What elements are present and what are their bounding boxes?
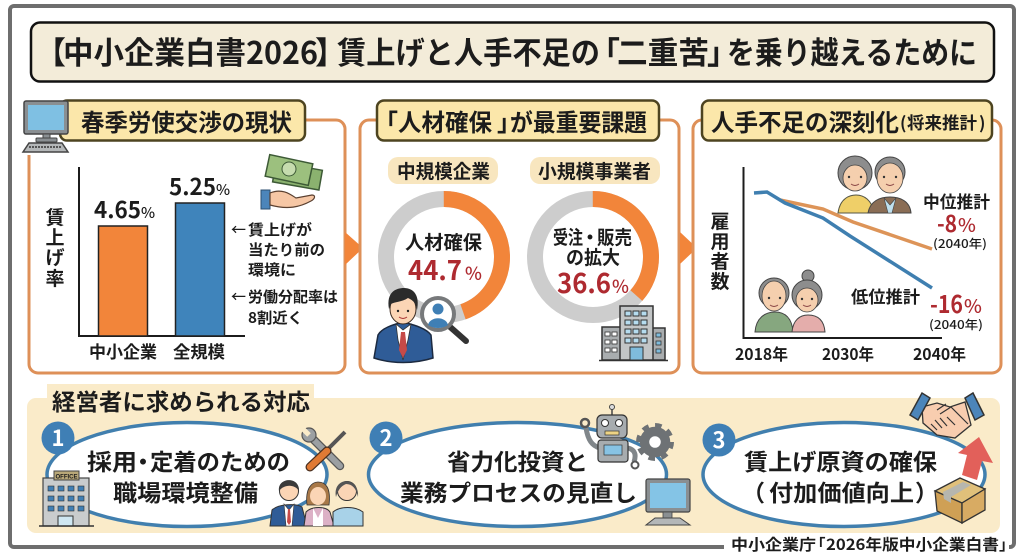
value: 4.65%: 4.65: [94, 191, 141, 225]
callout: 中位推計 -8%: [923, 188, 990, 252]
icon: computer: [23, 101, 68, 152]
icon: wrench and screwdriver: [302, 428, 345, 467]
action 2: 省力化投資: 省力化投資と: [447, 443, 588, 477]
line: 低位推計: [754, 192, 932, 288]
x axis labels: 2040年: [913, 341, 966, 365]
icon: three workers: [270, 480, 363, 526]
panel heading: 」: [497, 103, 521, 138]
number badge 1: 1: [52, 421, 64, 453]
axis label: 雇用者数: 者: [710, 247, 730, 274]
source note: 2026年版中小企業白書: [826, 533, 999, 555]
donut chart: 受注・販売の拡大 36.6%: の拡大: [566, 243, 620, 270]
action 3: 賃上げ原資: （: [742, 474, 765, 508]
label: 全規模: 全規模: [173, 338, 225, 363]
axis label: 雇用者数: 雇: [710, 207, 730, 234]
arrow: panel 1 to 2: [345, 232, 363, 265]
icon: businessman with magnifier: [374, 288, 466, 362]
action 3: 賃上げ原資: ）: [915, 474, 938, 508]
number badge 1: [42, 421, 74, 454]
pill: 中規模企業: 中規模企業: [397, 157, 490, 184]
icon: money on hand: [261, 155, 322, 209]
action 1: 採用・定着: 採用: [87, 443, 137, 477]
action 3: 賃上げ原資: [702, 393, 993, 526]
annotation: 賃上げが当たり前の環境に: 当たり前の: [248, 239, 325, 260]
callout: 中位推計 -8%: %: [958, 211, 976, 238]
panel heading: ): [979, 109, 985, 134]
callout: 低位推計 -16%: -16: [930, 285, 963, 320]
donut chart: 受注・販売の拡大 36.6%: [535, 199, 651, 315]
annotation: 労働分配率は8割近く: 労働分配率は: [248, 286, 338, 307]
section heading: 経営者に求められる対応: [52, 383, 310, 417]
number badge 2: 2: [380, 421, 392, 453]
annotation: 労働分配率は8割近く: 8割近く: [248, 307, 303, 328]
donut chart: 受注・販売の拡大 36.6%: 受注: [553, 223, 583, 250]
donut chart: 人材確保 44.7%: 44.7: [408, 249, 462, 288]
donut chart: 受注・販売の拡大 36.6%: 36.6: [557, 262, 611, 301]
title banner: 【: [35, 28, 66, 73]
source note: 中小企業庁: [731, 533, 816, 555]
axis label: 賃上げ率: 率: [45, 264, 65, 291]
axis label: 賃上げ率: 賃: [45, 203, 65, 230]
panel heading: 人材確保: [398, 103, 492, 138]
annotation: 労働分配率は8割近く: ←: [231, 286, 246, 307]
annotation: 賃上げが当たり前の環境に: 環境に: [248, 259, 296, 280]
source note: 」: [999, 533, 1015, 555]
arrow: panel 2 to 3: [680, 232, 697, 264]
axis label: 賃上げ率: [45, 203, 65, 291]
icon: senior couple (bottom): [755, 270, 825, 332]
icon: cardboard box: [935, 478, 985, 523]
title banner: 中小企業白書2026: [63, 28, 318, 73]
callout: 中位推計 -8%: 中位推計: [923, 188, 990, 213]
icon: office: [39, 471, 94, 526]
bar: 全規模: [176, 203, 224, 336]
panel: 経営者に求められる対応: [27, 383, 1000, 533]
icon: red up arrow: [958, 437, 993, 480]
icon: monitor: [646, 479, 690, 525]
annotation: 賃上げが当たり前の環境に: [231, 219, 325, 280]
icon: senior couple (top): [838, 156, 911, 213]
axis label: 賃上げ率: 上: [45, 223, 65, 250]
donut chart: 受注・販売の拡大 36.6%: ・: [580, 223, 600, 250]
bar chart: 賃上げ率: [79, 167, 245, 363]
axis label: 賃上げ率: げ: [45, 243, 65, 270]
axis label: 雇用者数: 数: [710, 267, 730, 294]
action 3: 賃上げ原資: 賃上げ原資の確保: [744, 443, 937, 477]
callout: 低位推計 -16%: (2040年): [929, 316, 983, 333]
title banner: 「: [589, 28, 620, 73]
callout: 低位推計 -16%: 低位推計: [851, 283, 920, 308]
action 3: 賃上げ原資: 付加価値向上: [769, 474, 914, 508]
title banner: [31, 22, 994, 82]
annotation: 賃上げが当たり前の環境に: 賃上げが: [248, 219, 312, 240]
axis label: 雇用者数: 用: [710, 227, 730, 254]
panel heading: 「: [374, 103, 398, 138]
donut chart: 人材確保 44.7%: 人材確保: [405, 228, 482, 255]
panel: 人手不足の深刻化: [693, 100, 1001, 373]
callout: 低位推計 -16%: %: [964, 292, 982, 319]
label: 中小企業: 中小企業: [89, 338, 157, 363]
number badge 2: [370, 421, 402, 454]
number badge 3: 3: [713, 423, 725, 455]
donut chart: 受注・販売の拡大 36.6%: %: [612, 273, 629, 299]
line: 中位推計: [780, 200, 932, 249]
panel heading: 将来推計: [907, 109, 977, 134]
panel heading: 人手不足の深刻化: [711, 103, 899, 138]
icon: gear: [638, 426, 672, 458]
x axis labels: 2018年: [735, 341, 788, 365]
action 1: 採用・定着: 定着のための: [150, 443, 290, 477]
line chart: 雇用者数: [735, 167, 966, 365]
x axis labels: 2030年: [822, 341, 874, 365]
source note: [724, 533, 1015, 555]
panel heading: が最重要課題: [510, 103, 647, 138]
title banner: 】: [315, 28, 346, 73]
title banner: 」: [707, 28, 738, 73]
bar: 中小企業: [98, 226, 148, 336]
icon: handshake: [910, 393, 984, 438]
title banner: を乗り越えるために: [727, 28, 977, 73]
donut chart: 人材確保 44.7%: [386, 199, 502, 315]
x axis labels: [735, 341, 966, 365]
action 1: 採用・定着: [39, 421, 363, 526]
value: 5.25%: %: [216, 179, 230, 200]
donut chart: 人材確保 44.7%: %: [465, 260, 482, 286]
title banner: 賃上げと人手不足の: [337, 28, 600, 73]
value: 4.65%: %: [141, 202, 155, 223]
annotation: 賃上げが当たり前の環境に: ←: [231, 219, 246, 240]
title banner: 二重苦: [617, 28, 709, 73]
panel heading: (: [900, 109, 906, 134]
icon: office: OFFICE: [56, 474, 78, 480]
action 2: 省力化投資: 業務プロセスの見直し: [400, 474, 637, 508]
action 1: 採用・定着: ・: [132, 443, 154, 477]
panel: 人材確保が最重要課題: [360, 100, 679, 373]
panel heading: [702, 100, 992, 140]
annotation: 労働分配率は8割近く: [231, 286, 338, 328]
callout: 中位推計 -8%: (2040年): [933, 235, 987, 252]
icon: robot: [581, 404, 638, 468]
pill: 小規模事業者: 小規模事業者: [538, 157, 651, 184]
source note: 「: [810, 533, 826, 555]
action 2: 省力化投資: [368, 404, 690, 526]
axis label: 雇用者数: [710, 207, 730, 294]
number badge 3: [702, 423, 736, 456]
icon: office buildings: [599, 306, 668, 360]
callout: 中位推計 -8%: -8: [937, 205, 957, 239]
action 1: 採用・定着: 職場環境整備: [113, 474, 258, 508]
callout: 低位推計 -16%: [851, 283, 983, 333]
panel heading: [374, 100, 659, 140]
panel heading: 春季労使交渉の現状: [81, 103, 292, 138]
value: 5.25%: 5.25: [169, 168, 216, 202]
panel: 春季労使交渉の現状: [20, 96, 345, 373]
donut chart: 受注・販売の拡大 36.6%: 販売: [597, 223, 632, 250]
